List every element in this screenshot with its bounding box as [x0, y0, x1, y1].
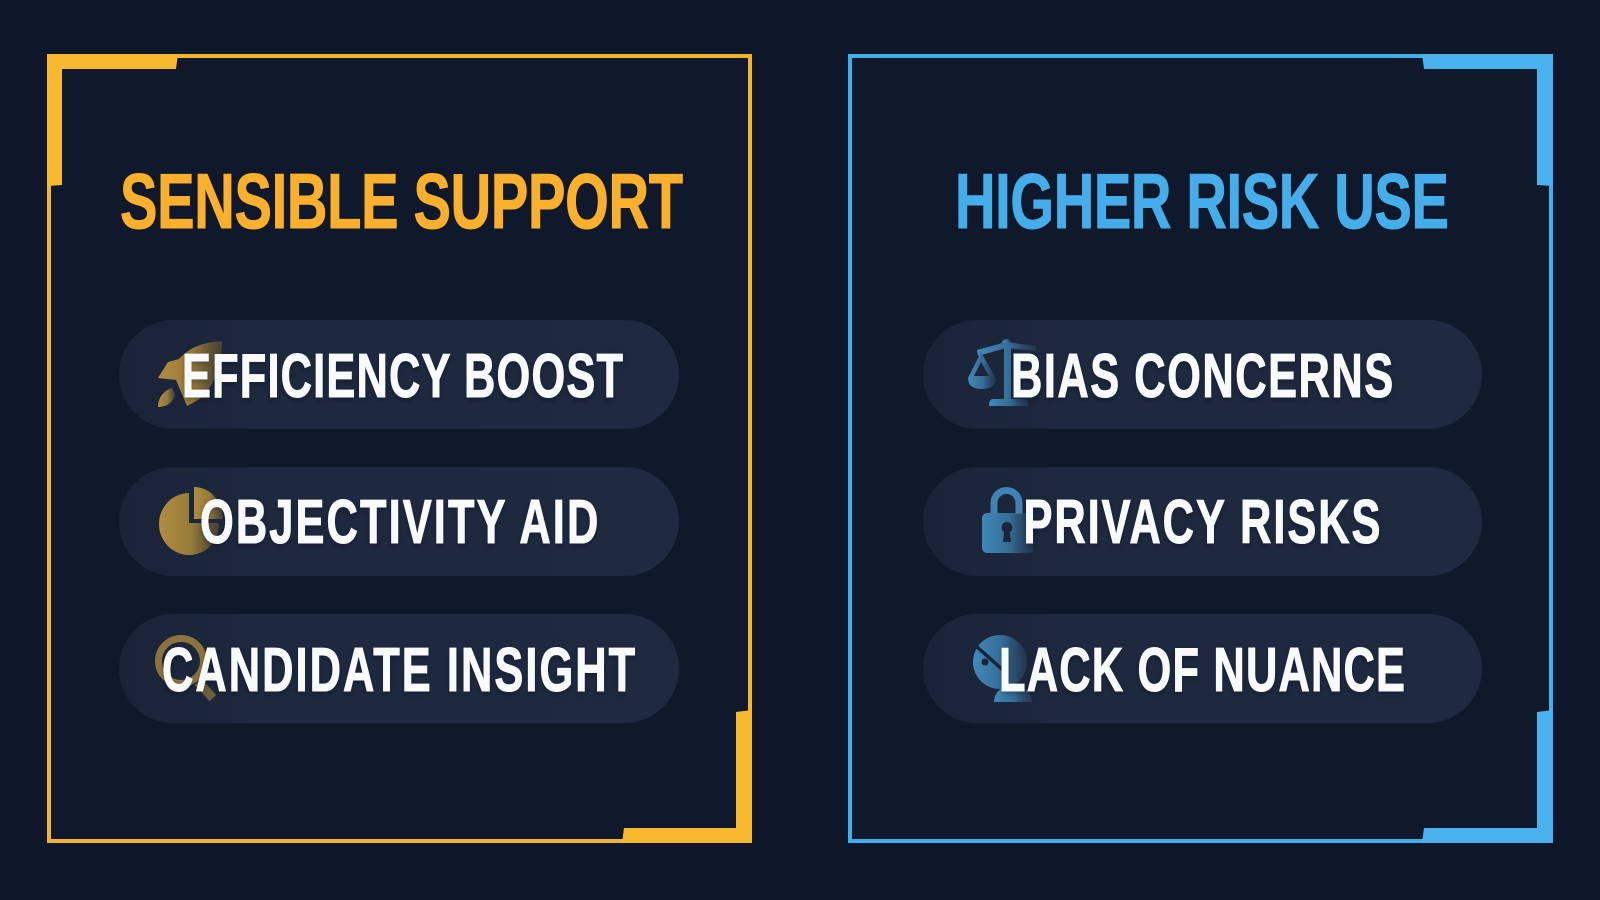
heading: higher risk use: HIGHER RISK USE	[955, 158, 1449, 245]
label: candidate insight: CANDIDATE INSIGHT	[162, 637, 635, 705]
panel frame: gold	[47, 54, 752, 843]
label: privacy risks: PRIVACY RISKS	[1024, 489, 1381, 557]
label: efficiency boost: EFFICIENCY BOOST	[182, 343, 623, 411]
icon: rocket	[158, 341, 222, 407]
label: objectivity aid: OBJECTIVITY AID	[200, 489, 598, 557]
pill: bias concerns	[923, 320, 1482, 429]
icon: padlock	[982, 490, 1033, 553]
pill: candidate insight	[119, 614, 679, 723]
label: lack of nuance: LACK OF NUANCE	[999, 637, 1405, 705]
label: bias concerns: BIAS CONCERNS	[1011, 343, 1393, 411]
panel: higher risk use	[850, 54, 1553, 843]
panel frame: blue	[850, 54, 1553, 843]
heading: sensible support: SENSIBLE SUPPORT	[120, 158, 683, 245]
panel: sensible support	[47, 54, 752, 843]
icon: scales	[968, 339, 1036, 406]
icon: pie chart	[159, 487, 223, 555]
icon: head with slash	[973, 635, 1032, 702]
pill: lack of nuance	[923, 614, 1482, 723]
pill: objectivity aid	[119, 467, 679, 576]
pill: efficiency boost	[119, 320, 679, 429]
pill: privacy risks	[923, 467, 1482, 576]
icon: magnifier	[158, 638, 213, 698]
